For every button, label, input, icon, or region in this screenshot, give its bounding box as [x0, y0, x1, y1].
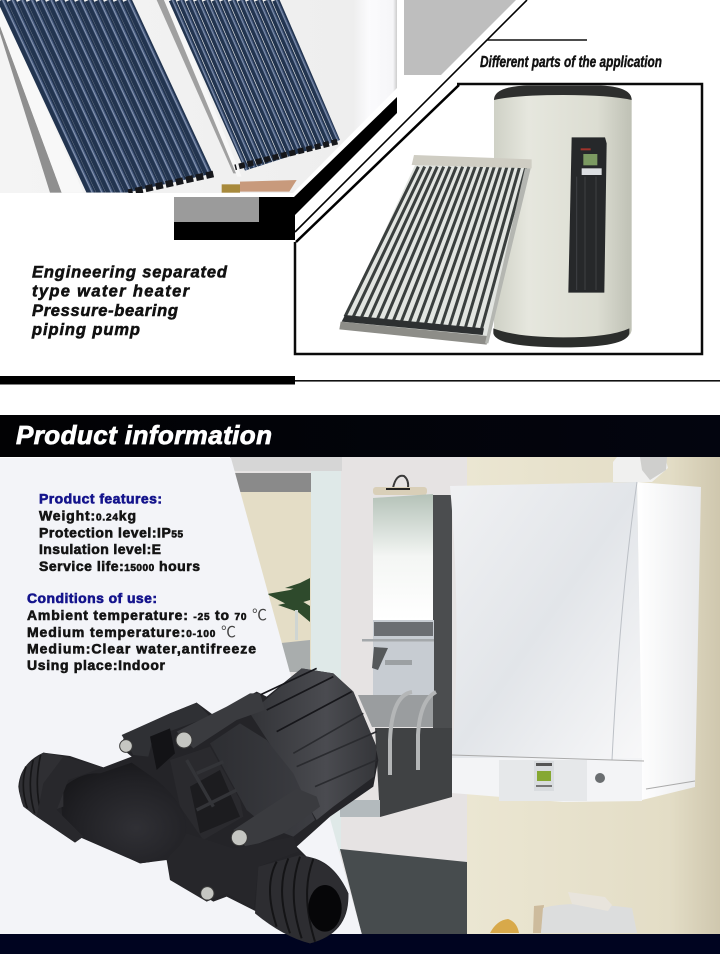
- divider thick: [0, 376, 295, 384]
- outlet connector: [255, 855, 348, 943]
- plant: [267, 578, 310, 640]
- boiler: [450, 457, 701, 802]
- divider thin: [295, 380, 720, 382]
- upper clamp and bracket: [122, 703, 210, 770]
- heading: product information: Product information: [16, 420, 272, 450]
- lower screw boss: [233, 788, 320, 848]
- control panel: [568, 137, 607, 293]
- photo: roof solar collectors: [0, 0, 397, 193]
- pump photo: [18, 668, 378, 943]
- basin: [358, 695, 433, 727]
- boiler knob: [595, 773, 605, 783]
- text block: conditions of use: Conditions of use:: [27, 590, 157, 606]
- text block: product features: [39, 490, 200, 574]
- grey block: [174, 197, 259, 222]
- inlet connector: [20, 753, 103, 842]
- text block: product features: Service life:15000 hours: [39, 558, 200, 574]
- grey wedge: [404, 0, 516, 75]
- bottom band: [0, 934, 720, 954]
- flue: [613, 457, 668, 482]
- heading: engineering pump: Engineering separated: [32, 264, 228, 282]
- rule above caption: [487, 39, 587, 41]
- text block: conditions of use: Medium temperature:0-100 ℃: [27, 624, 236, 641]
- text block: product features: Product features:: [39, 490, 162, 506]
- text block: conditions of use: Medium:Clear water,antifreeze: [27, 640, 256, 656]
- diagonal stripes: [295, 0, 527, 242]
- text block: conditions of use: Ambient temperature: -25 to 70 ℃: [27, 607, 267, 624]
- boiler display: [534, 761, 554, 791]
- text block: conditions of use: Using place:Indoor: [27, 657, 166, 673]
- upper screw boss: [177, 693, 265, 748]
- caption: different parts: Different parts of the application: [480, 54, 662, 71]
- floor: [340, 849, 467, 935]
- text block: product features: Weight:0.24kg: [39, 508, 136, 524]
- lower cabinet: [375, 728, 452, 817]
- pump silhouette: [18, 668, 378, 943]
- title band: [0, 415, 720, 457]
- heading: engineering pump: Pressure-bearing: [32, 302, 178, 320]
- elbow inlet: [60, 763, 187, 863]
- solar collector: [339, 155, 532, 345]
- lamp: [373, 476, 427, 495]
- black diagonal band and blocks: [174, 97, 397, 240]
- text block: product features: Protection level:IP55: [39, 524, 183, 540]
- motor cap: [250, 668, 377, 820]
- water tank: [493, 85, 632, 347]
- towels and accessories: [490, 892, 637, 933]
- screws: [120, 732, 247, 900]
- heading: engineering pump: piping pump: [31, 321, 140, 339]
- panel: white slanted info background: [0, 458, 362, 935]
- room photo background: [230, 457, 720, 935]
- product photo: tank and collector: [339, 85, 632, 347]
- panel: product frame: [295, 84, 702, 354]
- lower housing: [167, 833, 298, 908]
- text block: conditions of use: [27, 590, 267, 673]
- text block: product features: Insulation level:E: [39, 541, 161, 557]
- heading: engineering pump: [31, 264, 228, 339]
- heading: engineering pump: type water heater: [32, 282, 191, 300]
- impeller grille: [170, 747, 243, 840]
- towel rails: [390, 692, 436, 775]
- mirror cabinet: [362, 494, 452, 735]
- motor barrel: [210, 723, 315, 837]
